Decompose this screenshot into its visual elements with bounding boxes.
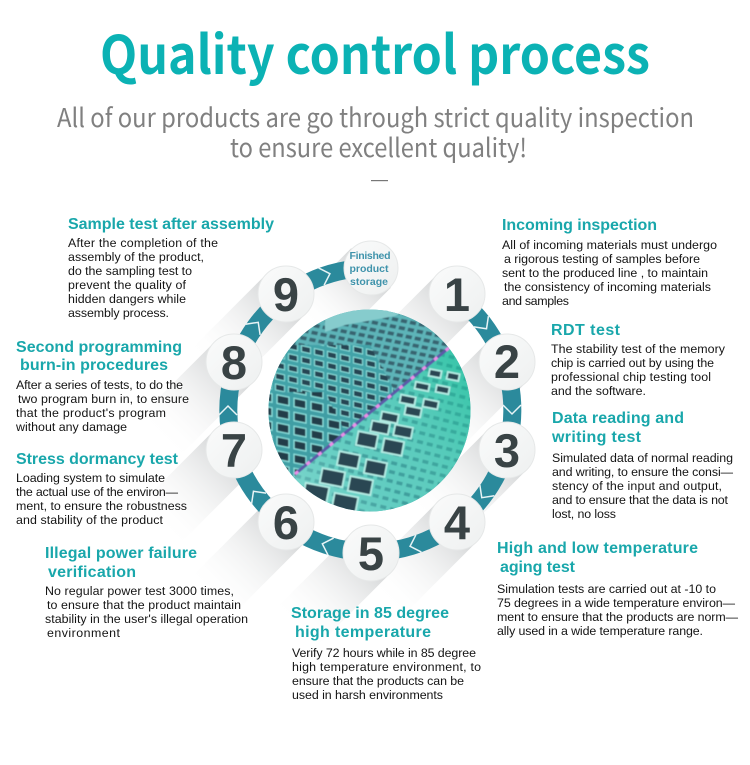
text block: incoming inspection: a rigorous testing of samples before bbox=[504, 252, 700, 266]
step 6 badge bbox=[258, 494, 314, 550]
text block: data reading and writing test bbox=[551, 410, 734, 521]
subtitle: All of our products are go through strict quality inspection bbox=[57, 98, 694, 135]
text block: storage in 85 degree high temperature: high temperature bbox=[295, 624, 431, 641]
text block: incoming inspection bbox=[502, 217, 717, 308]
text block: second programming burn-in procedures: that the product's program bbox=[16, 406, 166, 420]
short divider dash bbox=[371, 180, 388, 181]
text block: second programming burn-in procedures: burn-in procedures bbox=[20, 357, 168, 374]
finished product storage badge: product bbox=[350, 263, 389, 275]
text block: high and low temperature aging test: Simulation tests are carried out at -10 to bbox=[497, 582, 716, 596]
finished product storage badge bbox=[344, 241, 398, 295]
text block: illegal power failure verification bbox=[45, 545, 248, 640]
long shadows bbox=[136, 248, 527, 651]
text block: sample test after assembly: Sample test after assembly bbox=[68, 216, 274, 233]
text block: storage in 85 degree high temperature: high temperature environment, to bbox=[292, 660, 481, 674]
teal ring bbox=[228, 268, 512, 552]
text block: data reading and writing test: lost, no loss bbox=[552, 507, 616, 521]
text block: storage in 85 degree high temperature: ensure that the products can be bbox=[292, 674, 464, 688]
text block: data reading and writing test: Data reading and bbox=[552, 410, 684, 427]
step 4 badge: 4 bbox=[444, 496, 470, 549]
text block: stress dormancy test: Loading system to simulate bbox=[16, 471, 165, 485]
ring chevrons bbox=[219, 265, 521, 555]
text block: RDT test: professional chip testing tool bbox=[551, 370, 711, 384]
text block: second programming burn-in procedures: two program burn in, to ensure bbox=[18, 392, 189, 406]
text block: high and low temperature aging test: ally used in a wide temperature range. bbox=[497, 624, 703, 638]
text block: second programming burn-in procedures: Second programming bbox=[16, 339, 182, 356]
text block: RDT test bbox=[551, 322, 726, 398]
text block: high and low temperature aging test: aging test bbox=[500, 559, 576, 576]
subtitle: to ensure excellent quality! bbox=[230, 128, 527, 165]
text block: high and low temperature aging test bbox=[497, 540, 739, 638]
text block: sample test after assembly: hidden dangers while bbox=[68, 292, 186, 306]
step 8 badge: 8 bbox=[221, 336, 247, 389]
step 2 badge bbox=[479, 334, 535, 390]
text block: storage in 85 degree high temperature bbox=[291, 605, 481, 702]
text block: sample test after assembly: assembly process. bbox=[68, 306, 169, 320]
step 1 badge: 1 bbox=[444, 268, 470, 321]
text block: illegal power failure verification: No regular power test 3000 times, bbox=[45, 584, 234, 598]
text block: RDT test: and the software. bbox=[551, 384, 646, 398]
text block: RDT test: chip is carried out by using the bbox=[551, 356, 714, 370]
text block: data reading and writing test: stency of the input and output, bbox=[552, 479, 722, 493]
text block: incoming inspection: and samples bbox=[502, 294, 569, 308]
step 8 badge bbox=[206, 334, 262, 390]
step 2 badge: 2 bbox=[494, 335, 520, 388]
text block: illegal power failure verification: to ensure that the product maintain bbox=[47, 598, 241, 612]
text block: stress dormancy test: ment, to ensure the robustness bbox=[16, 499, 187, 513]
text block: illegal power failure verification: verification bbox=[48, 564, 136, 581]
text block: RDT test: RDT test bbox=[551, 322, 621, 339]
step 5 badge: 5 bbox=[358, 527, 384, 580]
text block: illegal power failure verification: environment bbox=[47, 626, 121, 640]
finished product storage badge: storage bbox=[350, 276, 388, 288]
text block: sample test after assembly: do the sampling test to bbox=[68, 264, 192, 278]
text block: second programming burn-in procedures: After a series of tests, to do the bbox=[16, 378, 183, 392]
step 9 badge bbox=[258, 266, 314, 322]
step 5 badge bbox=[343, 525, 399, 581]
text block: sample test after assembly: prevent the quality of bbox=[68, 278, 187, 292]
subtitle bbox=[57, 98, 694, 165]
step 9 badge: 9 bbox=[273, 268, 299, 321]
center photo: memory chips on test boards bbox=[268, 310, 470, 512]
text block: stress dormancy test: and stability of the product bbox=[16, 513, 164, 527]
text block: incoming inspection: All of incoming materials must undergo bbox=[502, 238, 717, 252]
text block: sample test after assembly bbox=[68, 216, 274, 320]
text block: data reading and writing test: and writing, to ensure the consi— bbox=[552, 465, 734, 479]
text block: incoming inspection: sent to the produced line , to maintain bbox=[502, 266, 708, 280]
circular process diagram bbox=[170, 240, 536, 616]
text block: stress dormancy test: the actual use of the environ— bbox=[16, 485, 179, 499]
text block: stress dormancy test bbox=[16, 451, 187, 527]
text block: data reading and writing test: writing test bbox=[551, 429, 642, 446]
text block: high and low temperature aging test: 75 degrees in a wide temperature environ— bbox=[497, 596, 736, 610]
text block: sample test after assembly: assembly of the product, bbox=[68, 250, 204, 264]
text block: second programming burn-in procedures: without any damage bbox=[15, 420, 127, 434]
text block: RDT test: The stability test of the memory bbox=[551, 342, 726, 356]
text block: sample test after assembly: After the completion of the bbox=[68, 236, 218, 250]
step 1 badge bbox=[429, 266, 485, 322]
text block: data reading and writing test: Simulated data of normal reading bbox=[552, 451, 733, 465]
step 7 badge: 7 bbox=[221, 424, 247, 477]
text block: illegal power failure verification: Illegal power failure bbox=[45, 545, 197, 562]
text block: data reading and writing test: and to ensure that the data is not bbox=[552, 493, 729, 507]
text block: high and low temperature aging test: High and low temperature bbox=[497, 540, 698, 557]
text block: storage in 85 degree high temperature: Storage in 85 degree bbox=[291, 605, 449, 622]
step 4 badge bbox=[429, 494, 485, 550]
text block: incoming inspection: the consistency of incoming materials bbox=[504, 280, 711, 294]
text block: high and low temperature aging test: ment to ensure that the products are norm— bbox=[497, 610, 739, 624]
text block: incoming inspection: Incoming inspection bbox=[502, 217, 657, 234]
text block: illegal power failure verification: stability in the user's illegal operation bbox=[45, 612, 248, 626]
text block: stress dormancy test: Stress dormancy test bbox=[16, 451, 179, 468]
text block: storage in 85 degree high temperature: Verify 72 hours while in 85 degree bbox=[292, 646, 476, 660]
finished product storage badge: Finished bbox=[350, 250, 390, 262]
text block: storage in 85 degree high temperature: used in harsh environments bbox=[292, 688, 443, 702]
title: Quality control process bbox=[100, 14, 650, 90]
step 3 badge: 3 bbox=[494, 424, 520, 477]
step 7 badge bbox=[206, 422, 262, 478]
text block: second programming burn-in procedures bbox=[15, 339, 189, 434]
step 6 badge: 6 bbox=[273, 496, 299, 549]
step 3 badge bbox=[479, 422, 535, 478]
